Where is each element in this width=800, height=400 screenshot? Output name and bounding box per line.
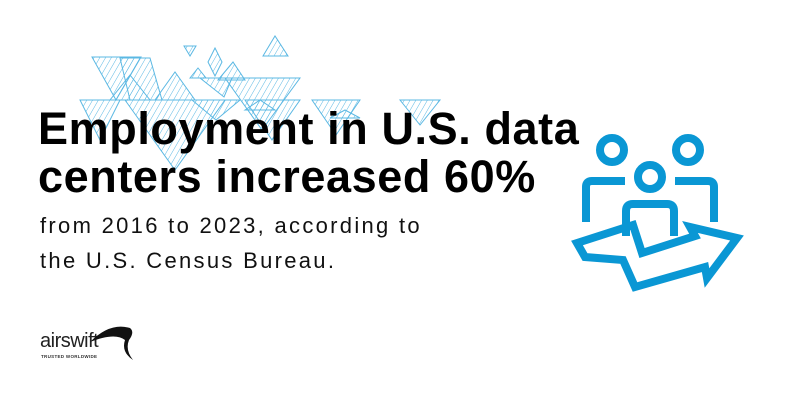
title <box>38 103 580 202</box>
subtitle: from 2016 to 2023, according to <box>40 213 422 238</box>
title: centers increased 60% <box>38 151 536 202</box>
logo: airswift: airswift <box>40 330 98 352</box>
subtitle <box>40 213 422 273</box>
title: Employment in U.S. data <box>38 103 579 154</box>
subtitle: the U.S. Census Bureau. <box>40 248 336 273</box>
logo: airswift <box>40 326 133 360</box>
logo: airswift: TRUSTED WORLDWIDE <box>41 354 97 359</box>
